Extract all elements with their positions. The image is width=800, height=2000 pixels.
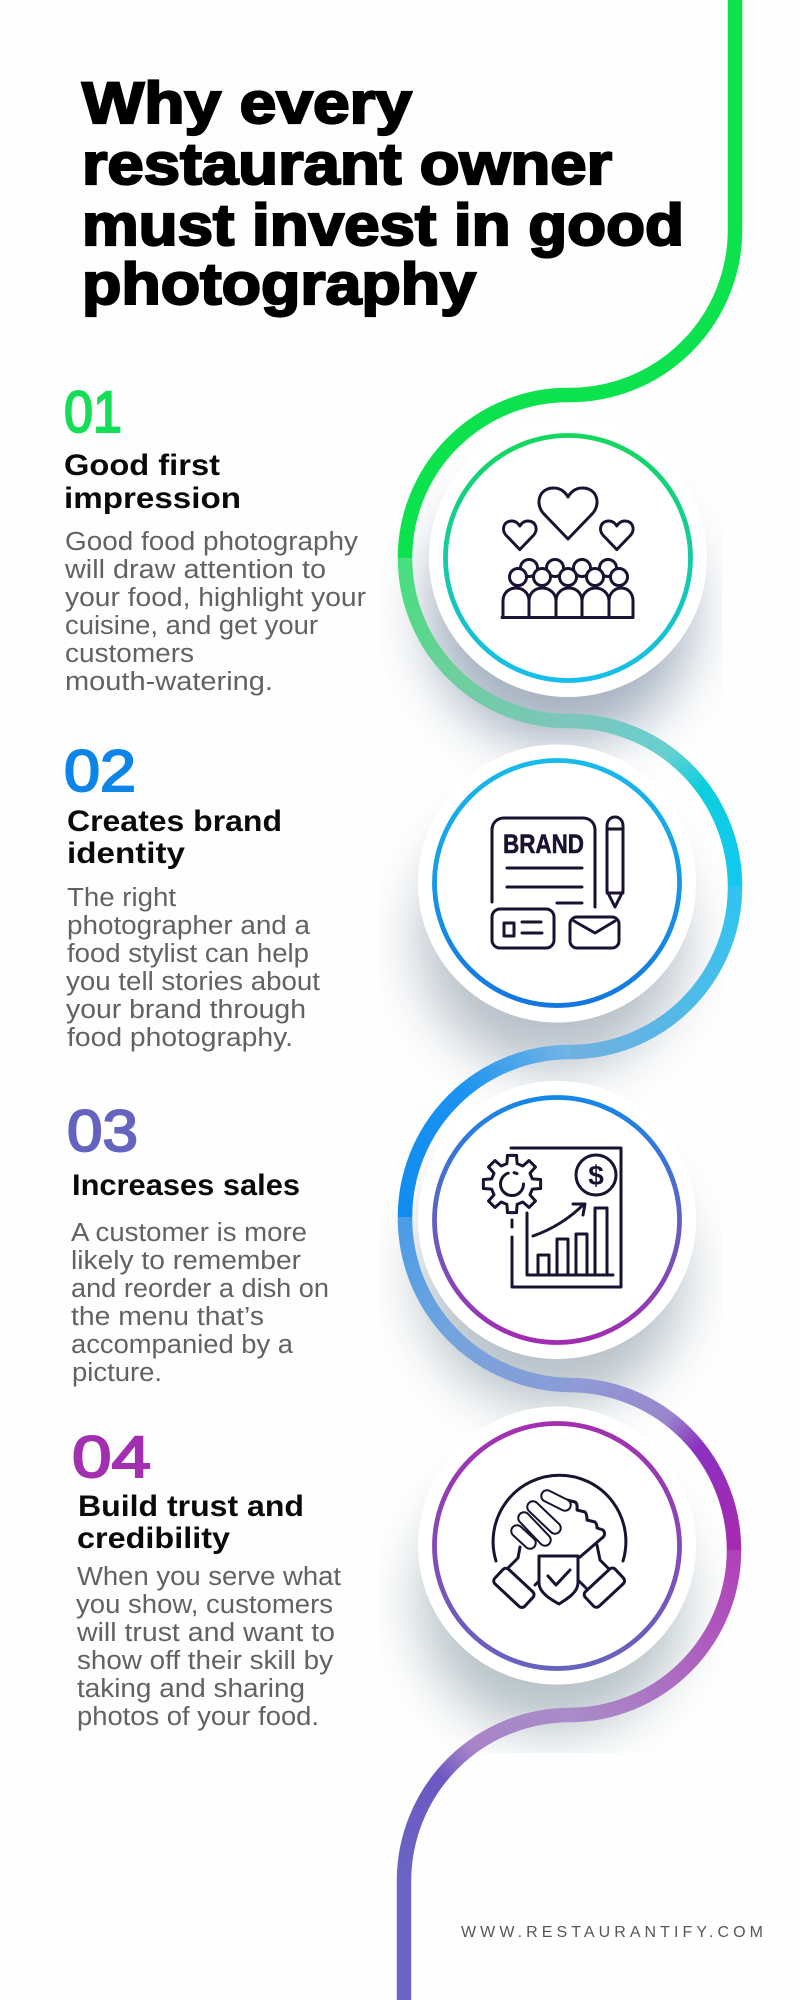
heading 04: Build trust and xyxy=(78,1490,304,1523)
body 01: cuisine, and get your xyxy=(65,612,319,640)
circle badge 1 xyxy=(429,419,707,697)
icon: brand document, pencil, card and envelope xyxy=(492,817,623,948)
body 04: When you serve what xyxy=(77,1563,341,1591)
heading 01 xyxy=(64,449,241,515)
body 04: will trust and want to xyxy=(76,1619,335,1647)
heading 04 xyxy=(77,1490,304,1555)
body 02: photographer and a xyxy=(67,912,311,940)
body 01: your food, highlight your xyxy=(65,584,367,612)
number 03: 03 xyxy=(67,1099,138,1164)
number 02: 02 xyxy=(64,739,136,804)
body 03: the menu that’s xyxy=(71,1303,264,1331)
title xyxy=(82,71,684,317)
panel: 04 build trust and credibility text xyxy=(72,1425,341,1731)
heading 02: identity xyxy=(67,837,185,870)
body 02: food stylist can help xyxy=(67,940,309,968)
body 02: The right xyxy=(67,884,176,912)
heading 01: impression xyxy=(64,482,241,515)
body 01 xyxy=(64,528,367,696)
icon: crowd with hearts xyxy=(502,488,633,618)
heading 02: Creates brand xyxy=(67,805,282,838)
body 02: food photography. xyxy=(67,1024,293,1052)
body 04: photos of your food. xyxy=(77,1703,319,1731)
circle badge 2 xyxy=(418,744,696,1022)
body 03: A customer is more xyxy=(71,1219,307,1247)
body 01: customers xyxy=(65,640,194,668)
circle badge 3 xyxy=(418,1081,696,1359)
icon: clasped hands with shield xyxy=(492,1475,626,1609)
body 03: and reorder a dish on xyxy=(71,1275,329,1303)
circle badge 4 xyxy=(418,1406,696,1684)
body 02: you tell stories about xyxy=(66,968,320,996)
title: photography xyxy=(82,252,476,317)
icon: gear, dollar coin and growth chart: $ xyxy=(588,1160,604,1191)
body 04: taking and sharing xyxy=(77,1675,305,1703)
footer website url: WWW.RESTAURANTIFY.COM xyxy=(461,1924,763,1941)
body 02: your brand through xyxy=(66,996,306,1024)
title: restaurant owner xyxy=(82,132,612,197)
body 01: mouth-watering. xyxy=(65,668,273,696)
body 01: will draw attention to xyxy=(64,556,326,584)
icon detail: clasped fingers xyxy=(517,1496,565,1543)
panel: 02 creates brand identity text xyxy=(64,739,320,1052)
heading 03: Increases sales xyxy=(72,1169,300,1202)
panel: 03 increases sales text xyxy=(67,1099,329,1387)
number 04: 04 xyxy=(72,1425,151,1490)
body 02 xyxy=(66,884,320,1052)
winding gradient path xyxy=(404,0,735,2000)
body 01: Good food photography xyxy=(65,528,358,556)
number 01: 01 xyxy=(64,380,122,445)
title: Why every xyxy=(82,71,412,136)
heading 04: credibility xyxy=(77,1522,230,1555)
body 04: you show, customers xyxy=(76,1591,333,1619)
icon: gear, dollar coin and growth chart xyxy=(483,1148,621,1287)
title: must invest in good xyxy=(82,193,684,258)
heading 01: Good first xyxy=(64,449,220,482)
circle drop shadows xyxy=(420,480,692,1732)
icon: brand document, pencil, card and envelope: BRAND xyxy=(503,829,584,859)
body 04 xyxy=(76,1563,341,1731)
body 03: picture. xyxy=(72,1359,162,1387)
heading 02 xyxy=(67,805,282,870)
body 03 xyxy=(71,1219,329,1387)
body 03: likely to remember xyxy=(71,1247,302,1275)
body 03: accompanied by a xyxy=(71,1331,294,1359)
panel: 01 good first impression text xyxy=(64,380,367,696)
body 04: show off their skill by xyxy=(77,1647,333,1675)
